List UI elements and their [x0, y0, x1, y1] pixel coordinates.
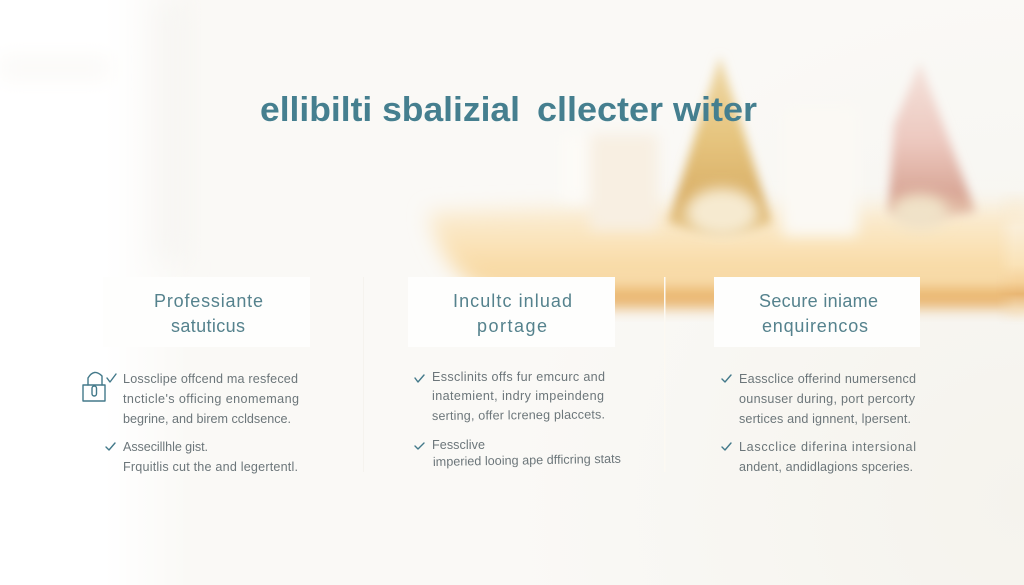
heading card 1: satuticus — [171, 316, 245, 336]
heading card 3 — [714, 277, 920, 347]
heading card 1 — [103, 277, 310, 347]
text block 3a: Eassclice offerind numersencd — [739, 372, 916, 386]
shelf right edge — [1005, 198, 1024, 320]
text block 3a: ounsuser during, port percorty — [739, 392, 916, 406]
title: cllecter witer — [537, 91, 757, 129]
heading card 3: enquirencos — [762, 316, 868, 336]
wooden shelf — [428, 205, 1024, 288]
title: ellibilti sbalizial — [260, 91, 520, 129]
icon: check 3b — [722, 443, 731, 450]
text block 1b: Frquitlis cut the and legertentl. — [123, 460, 298, 474]
icon: check 2b — [415, 443, 424, 449]
text block 1b — [123, 440, 298, 474]
heading card 1: Professiante — [154, 291, 263, 311]
icon: check 2a — [415, 375, 424, 382]
panel: column 2 — [408, 277, 621, 469]
text block 1a: begrine, and birem ccldsence. — [123, 412, 291, 426]
shelf shadow band — [490, 280, 1024, 308]
small jar — [562, 134, 658, 230]
text block 3b — [739, 440, 916, 474]
text block 1a: tncticle's officing enomemang — [123, 392, 299, 406]
heading card 3: Secure iniame — [759, 291, 878, 311]
text block 2a: inatemient, indry impeindeng — [432, 389, 604, 403]
text block 1b: Assecillhle gist. — [123, 440, 208, 454]
text block 2a — [432, 370, 605, 423]
icon: lock — [83, 372, 105, 401]
text block 3b: Lascclice diferina intersional — [739, 440, 916, 454]
text block 3a: sertices and ignnent, lpersent. — [739, 412, 911, 426]
text block 3b: andent, andidlagions spceries. — [739, 460, 913, 474]
heading card 2: Incultc inluad — [453, 291, 572, 311]
text block 2a: serting, offer lcreneg placcets. — [432, 407, 605, 423]
text block 1a: Lossclipe offcend ma resfeced — [123, 372, 298, 386]
pink cone — [888, 62, 976, 230]
title — [260, 91, 757, 129]
icon: check 1b — [106, 443, 115, 450]
icon: check 3a — [722, 375, 731, 382]
divider: right — [664, 277, 666, 472]
panel: column 1 — [83, 277, 310, 474]
text block 2b: imperied looing ape dfficring stats — [433, 452, 621, 469]
heading card 2 — [408, 277, 615, 347]
panel: column 3 — [714, 277, 920, 474]
heading card 2: portage — [477, 316, 547, 336]
icon: check 1a — [107, 374, 116, 382]
text block 1a — [123, 372, 299, 426]
text block 2a: Essclinits offs fur emcurc and — [432, 370, 605, 384]
gold cone — [668, 56, 772, 236]
divider: left — [363, 277, 364, 472]
text block 2b — [432, 438, 621, 469]
text block 2b: Fessclive — [432, 438, 485, 452]
white cylinder — [782, 106, 858, 236]
text block 3a — [739, 372, 916, 426]
